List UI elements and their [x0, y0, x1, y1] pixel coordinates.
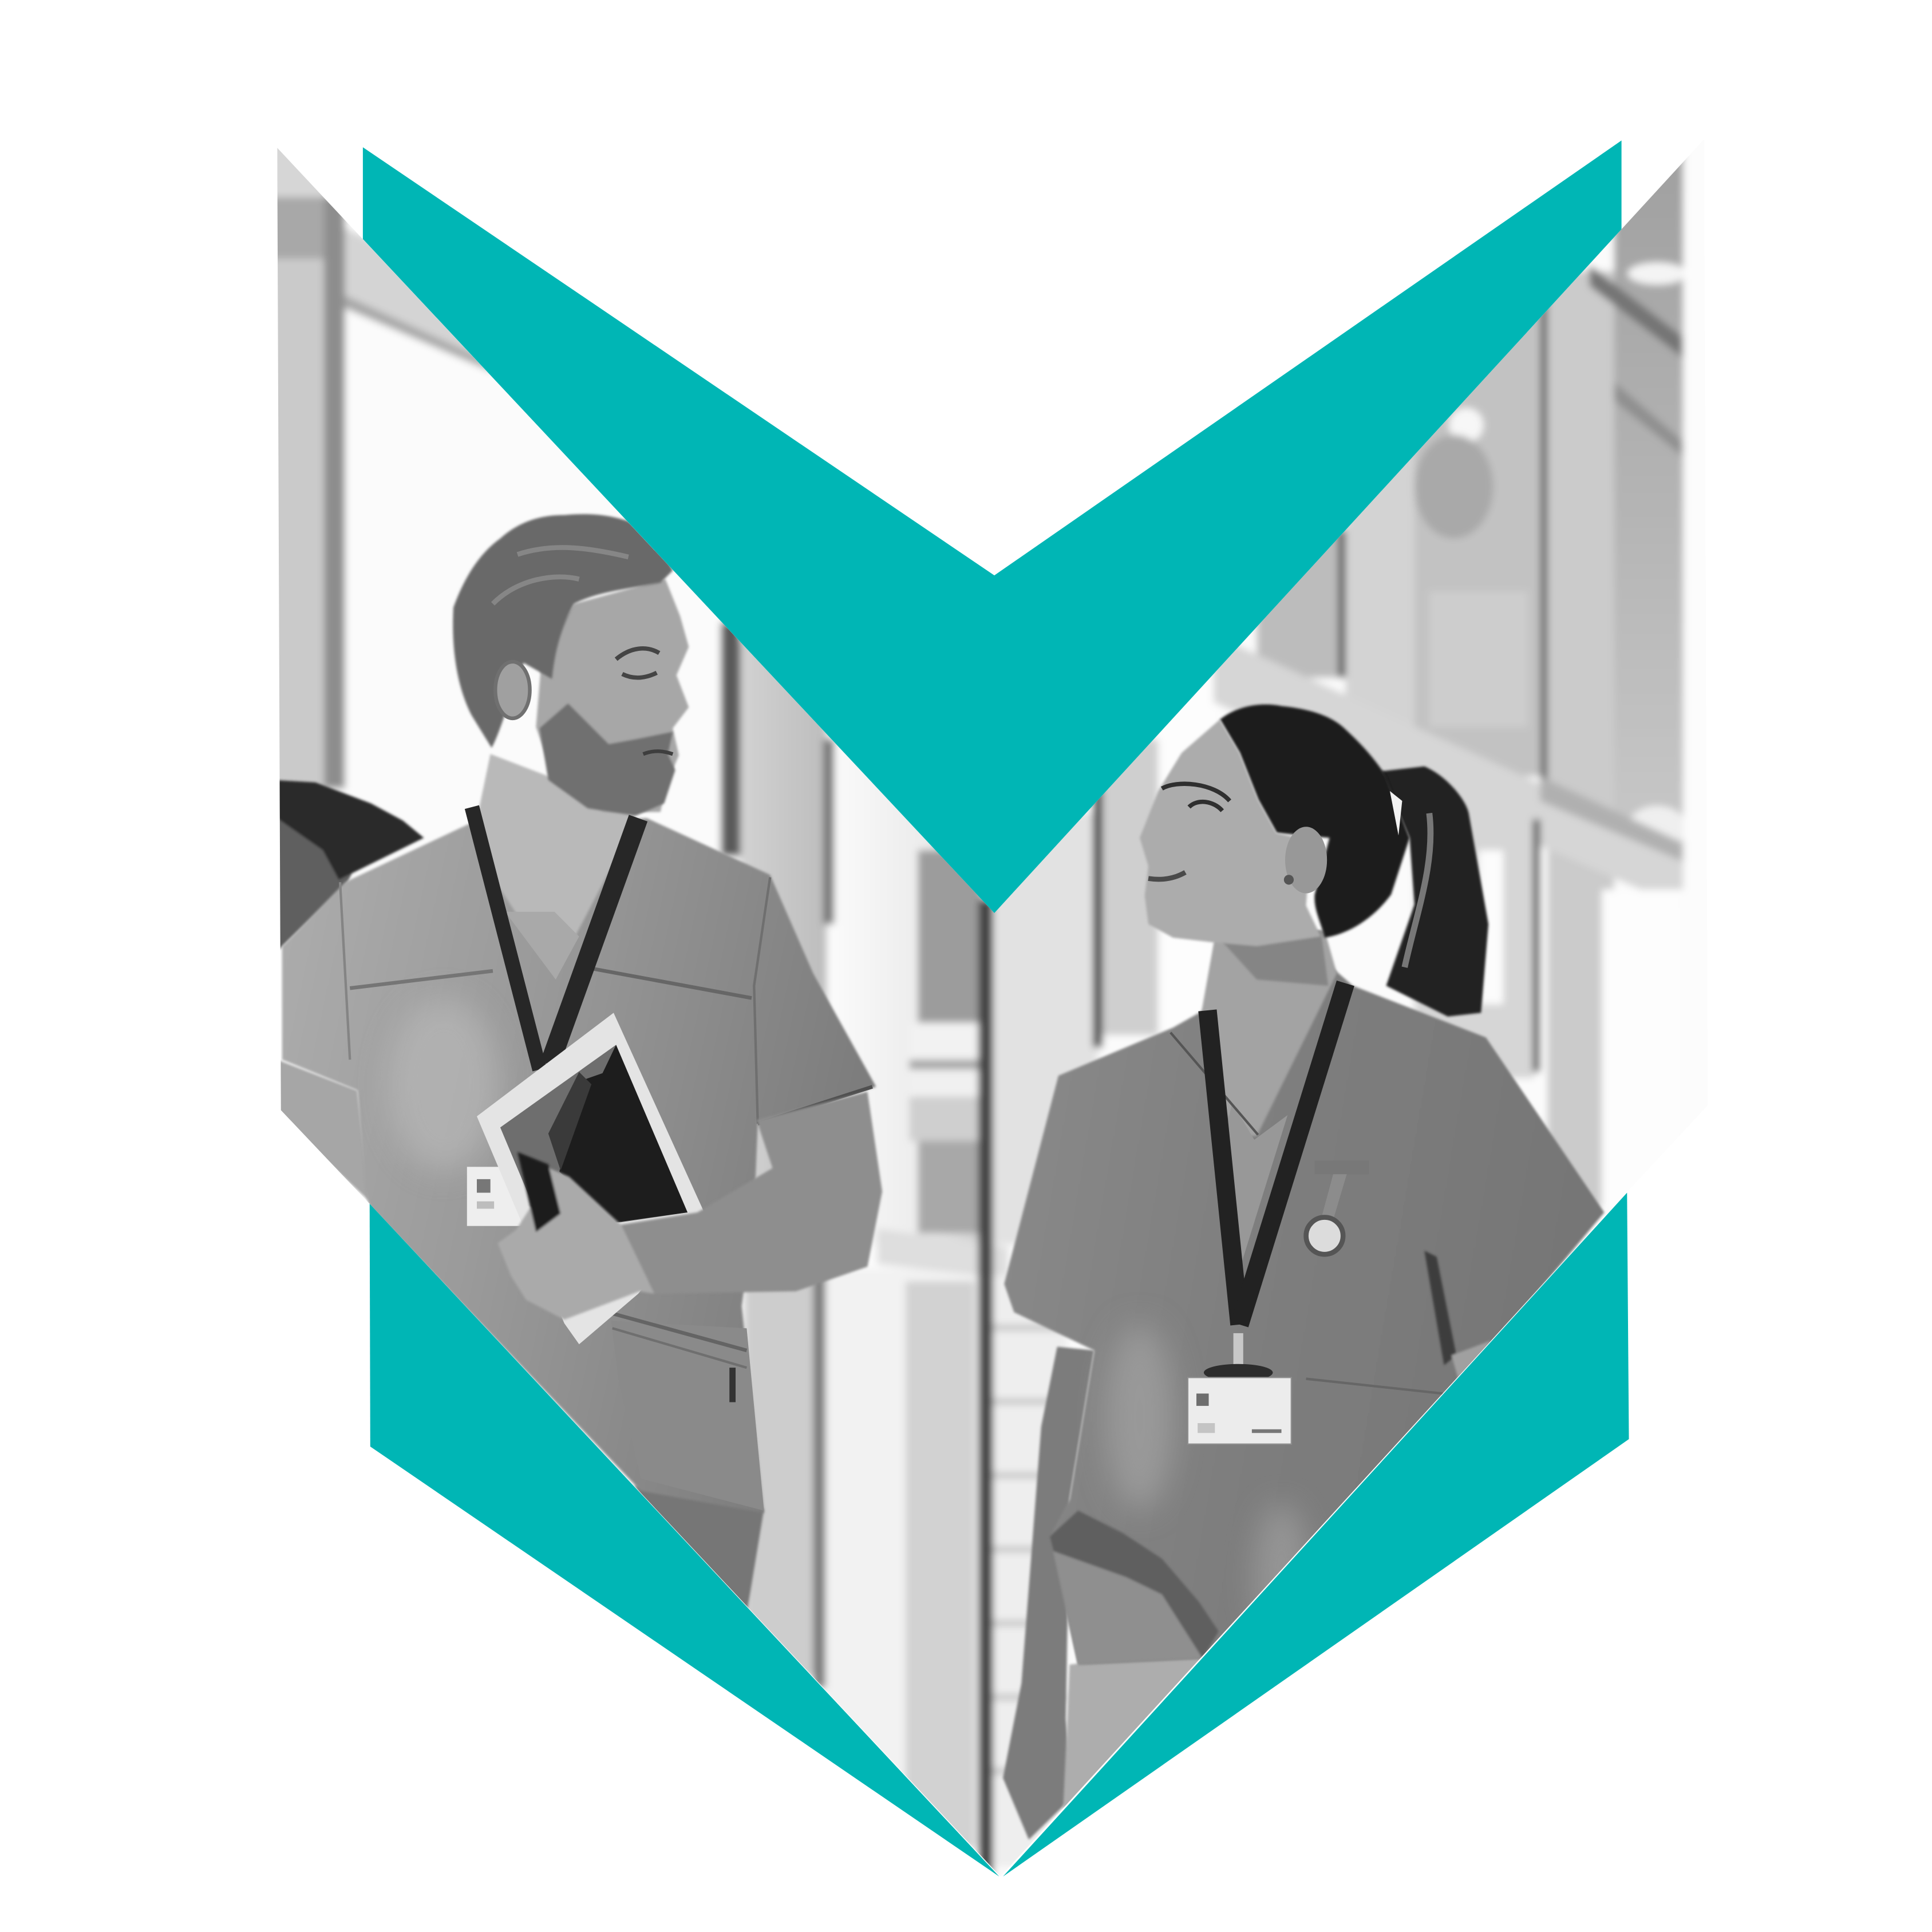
woman pocket seam	[1306, 1379, 1443, 1393]
woman under-jaw shading	[1220, 930, 1328, 986]
female nurse	[1003, 705, 1604, 1840]
man mouth	[643, 751, 673, 754]
fob watch	[1306, 1161, 1369, 1254]
man beard	[540, 704, 675, 816]
man scrub top	[282, 818, 876, 1513]
right-hand windows	[1257, 530, 1341, 678]
man trousers	[634, 1485, 764, 1614]
woman ID badge	[1188, 1333, 1291, 1444]
male nurse	[277, 514, 882, 1614]
man far arm	[277, 1060, 370, 1202]
woman shirt highlights	[1105, 1325, 1309, 1651]
photo: two healthcare workers in a corridor	[265, 123, 1719, 1898]
man face	[536, 579, 689, 812]
woman mouth	[1148, 872, 1186, 879]
corridor background	[265, 123, 1719, 1898]
woman ponytail	[1381, 767, 1488, 1017]
person behind, far left	[274, 780, 424, 951]
central columns	[721, 622, 741, 856]
man hair	[453, 514, 673, 748]
far-left column	[278, 255, 329, 811]
man arm and hand	[498, 1092, 882, 1319]
woman arm	[1003, 1347, 1094, 1840]
chevron photo composition	[277, 140, 1689, 1876]
woman face	[1140, 720, 1321, 946]
top teal chevron	[363, 140, 1622, 913]
woman undershirt	[1220, 1103, 1287, 1282]
woman ear	[1285, 827, 1327, 894]
woman lanyard	[1207, 983, 1345, 1325]
bottom teal chevron: right wing	[1003, 1193, 1629, 1876]
man lanyard	[472, 807, 638, 1069]
man shirt highlight	[388, 998, 499, 1171]
woman eye and brow	[1162, 784, 1230, 811]
woman scrub top	[1004, 961, 1604, 1665]
man lower pocket	[611, 1321, 764, 1511]
man ear	[495, 662, 530, 718]
man ID badge	[467, 1167, 524, 1226]
bottom teal chevron: left wing	[370, 1204, 999, 1876]
man eye and brow	[616, 649, 659, 678]
man tablet	[477, 1013, 705, 1344]
woman shirt folds	[1050, 1251, 1491, 1665]
man neck	[478, 754, 636, 973]
woman hair	[1220, 705, 1409, 938]
woman trousers	[1062, 1645, 1226, 1830]
window slats	[993, 813, 1098, 1244]
woman collar seam	[1171, 1033, 1258, 1135]
woman neck and chest	[1202, 930, 1337, 1136]
white window gap behind neck	[1327, 906, 1398, 989]
